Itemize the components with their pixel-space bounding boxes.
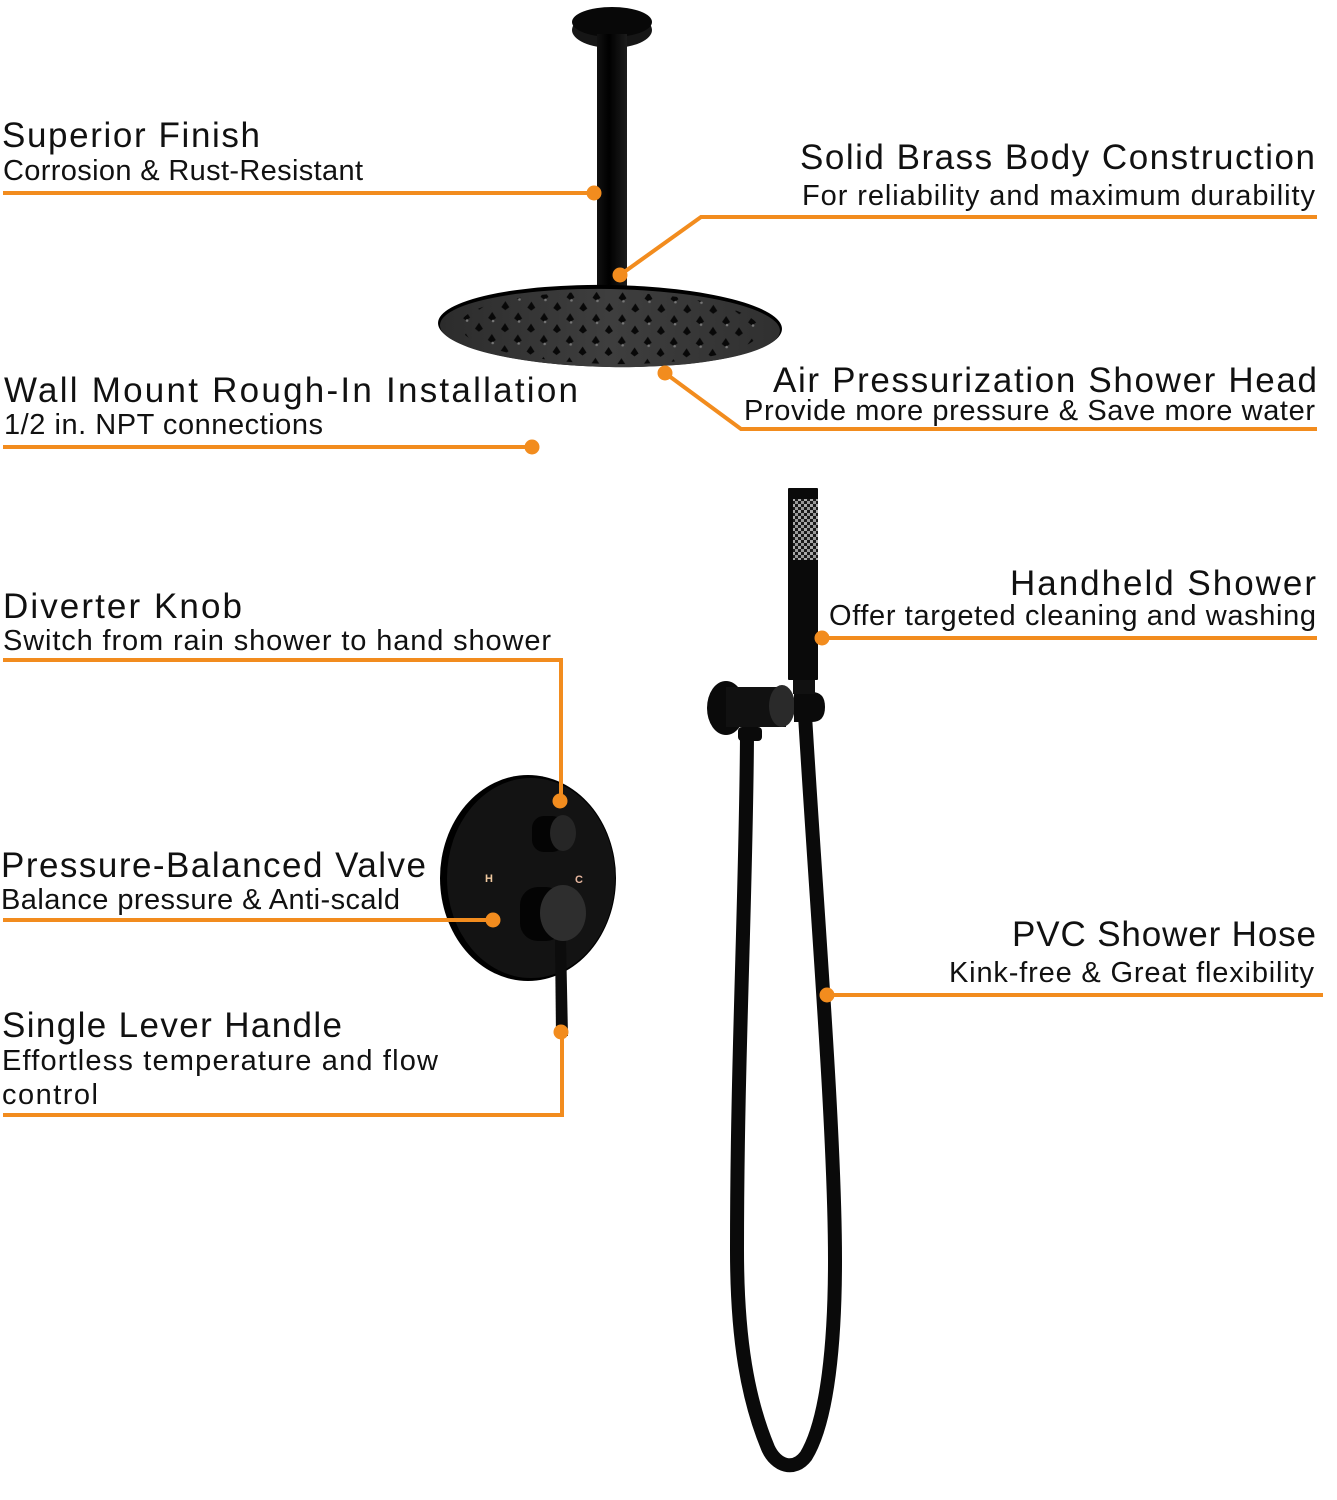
callout: Air Pressurization Shower Head xyxy=(658,361,1317,429)
callout: Handheld Shower: Offer targeted cleaning and washing xyxy=(829,600,1316,632)
callout: Single Lever Handle: control xyxy=(2,1079,98,1111)
valve trim plate xyxy=(440,775,616,981)
callout: Diverter Knob: Switch from rain shower to hand shower xyxy=(3,625,551,657)
product: handheld shower and hose xyxy=(707,488,835,1465)
callout: Single Lever Handle: Effortless temperature and flow xyxy=(2,1045,439,1077)
callout: Pressure-Balanced Valve: Balance pressure & Anti-scald xyxy=(1,884,400,916)
callout: Air Pressurization Shower Head: Air Pressurization Shower Head xyxy=(773,361,1317,400)
hand shower wand xyxy=(788,488,818,694)
callout: Wall Mount Rough-In Installation: 1/2 in. NPT connections xyxy=(4,409,323,441)
callout: PVC Shower Hose: PVC Shower Hose xyxy=(1012,915,1316,954)
callout: Solid Brass Body Construction: Solid Brass Body Construction xyxy=(800,138,1315,177)
callout: Diverter Knob: Diverter Knob xyxy=(3,587,242,626)
callout: Superior Finish: Corrosion & Rust-Resistant xyxy=(3,155,363,187)
callout: Air Pressurization Shower Head: Provide more pressure & Save more water xyxy=(744,395,1315,427)
callout: Pressure-Balanced Valve: Pressure-Balanced Valve xyxy=(1,846,426,885)
rain shower head disc xyxy=(437,282,783,370)
wall bracket xyxy=(707,681,825,741)
callout: Pressure-Balanced Valve xyxy=(1,846,500,928)
main knob xyxy=(520,885,586,941)
letter H: H xyxy=(485,873,493,885)
diverter knob xyxy=(532,815,576,852)
callout: Single Lever Handle xyxy=(2,1006,568,1115)
callout: Solid Brass Body Construction xyxy=(612,138,1317,282)
ceiling flange xyxy=(572,7,652,48)
callout: Single Lever Handle: Single Lever Handle xyxy=(2,1006,342,1045)
callout: Wall Mount Rough-In Installation xyxy=(3,371,578,454)
letter C: C xyxy=(575,874,583,886)
callout: Diverter Knob xyxy=(3,587,568,808)
callout: Handheld Shower xyxy=(814,564,1317,646)
callout: Wall Mount Rough-In Installation: Wall Mount Rough-In Installation xyxy=(4,371,578,410)
product: diverter valve xyxy=(440,775,616,1036)
hose xyxy=(737,715,835,1465)
callout: PVC Shower Hose xyxy=(820,915,1323,1002)
callout: Superior Finish xyxy=(2,116,602,200)
product: ceiling shower head xyxy=(437,7,783,370)
callout: Superior Finish: Superior Finish xyxy=(2,116,260,155)
shower arm xyxy=(597,34,627,286)
callout: Solid Brass Body Construction: For reliability and maximum durability xyxy=(802,180,1316,212)
lever handle xyxy=(555,940,568,1036)
callout: PVC Shower Hose: Kink-free & Great flexibility xyxy=(949,957,1314,989)
callout: Handheld Shower: Handheld Shower xyxy=(1010,564,1316,603)
